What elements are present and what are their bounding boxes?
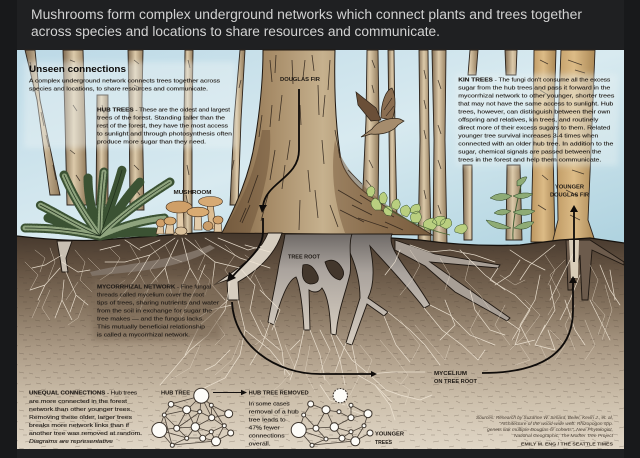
pale taproot of young tree bbox=[569, 240, 579, 278]
far right side root bbox=[395, 240, 510, 321]
text block: hub trees: trees of the forest. Standing taller than the bbox=[97, 116, 225, 122]
sources credit: Sources: Research by Suzanne W. Simard, Beiler, Kevin J., et. al, bbox=[476, 415, 613, 420]
small plant root bbox=[57, 241, 72, 272]
text block: kin trees: mycorrhizal network to other younger, shorter trees bbox=[458, 94, 615, 100]
fine mycelium threads bbox=[25, 240, 612, 405]
sources credit: genets link multiple Douglas-fir cohorts", New Phytologist, bbox=[487, 427, 613, 432]
text block: unequal connections bbox=[29, 391, 143, 445]
text block: kin trees: trees in the forest and help them communicate. bbox=[458, 158, 602, 164]
text box: mycorrhizal backing bbox=[93, 280, 221, 340]
intro text: species and locations, to share resources and communicate. bbox=[29, 86, 209, 92]
label: mycelium on tree root bbox=[434, 371, 478, 385]
label: hub tree: HUB TREE bbox=[161, 391, 190, 397]
text block: kin trees: trees, however, can distinguish between their own bbox=[458, 110, 610, 116]
leafy plant: dark green bbox=[486, 177, 535, 240]
text block: hub trees bbox=[97, 108, 232, 146]
label: Douglas fir: DOUGLAS FIR bbox=[280, 77, 320, 83]
text block: mycorrhizal network: tips of trees, sharing nutrients and water bbox=[97, 301, 219, 307]
label: hub tree removed: HUB TREE REMOVED bbox=[249, 391, 309, 397]
tree roots bbox=[57, 233, 624, 345]
text block: hub tree removed bbox=[249, 401, 299, 447]
text block: hub tree removed: tree leads to bbox=[249, 417, 286, 423]
sources credit: EMILY M. ENG / THE SEATTLE TIMES bbox=[521, 442, 613, 446]
text block: hub tree removed: connections bbox=[249, 433, 285, 439]
text block: kin trees: direct more of their excess sugars to them. Related bbox=[458, 126, 610, 132]
title bbox=[31, 7, 583, 39]
label: younger trees: YOUNGER bbox=[375, 432, 404, 438]
big right root bbox=[340, 234, 430, 345]
icon: bird bbox=[356, 88, 404, 137]
text block: unequal connections: Diagrams are representative bbox=[29, 439, 113, 445]
text block: kin trees: offspring and relatives, kin trees, and routinely bbox=[458, 118, 599, 124]
text block: kin trees: sugar, chemical signals are passed between the bbox=[458, 150, 601, 156]
pale left root bbox=[214, 233, 282, 300]
text block: mycorrhizal network: This mutually beneficial relationship bbox=[97, 325, 205, 331]
label: younger trees bbox=[375, 432, 404, 446]
label: mycelium on tree root: ON TREE ROOT bbox=[434, 379, 478, 385]
text block: hub trees: produce more sugar than they need. bbox=[97, 140, 207, 146]
intro text: A complex underground network connects trees together across bbox=[29, 78, 220, 84]
bark streaks on trees bbox=[30, 60, 585, 220]
text block: mycorrhizal network bbox=[97, 285, 219, 339]
text block: unequal connections: network than other younger trees. bbox=[29, 407, 133, 413]
label: younger Douglas fir: YOUNGER bbox=[555, 184, 584, 190]
illustration: soil bbox=[17, 232, 624, 449]
leafy plant: light green bbox=[367, 186, 467, 235]
fern bbox=[25, 170, 170, 236]
left lateral root bbox=[90, 245, 215, 276]
text block: mycorrhizal network: MYCORRHIZAL NETWORK - Fine fungal bbox=[97, 285, 211, 291]
text block: mycorrhizal network: from the soil in exchange for sugar the bbox=[97, 309, 212, 315]
text block: unequal connections: breaks more network links than if bbox=[29, 423, 130, 429]
dark topsoil line bbox=[17, 232, 624, 245]
central root bbox=[268, 234, 352, 335]
Douglas fir trunk bbox=[222, 50, 432, 235]
label: younger Douglas fir bbox=[550, 184, 589, 198]
mushrooms bbox=[156, 196, 223, 235]
title: across species and locations to share resources and communicate. bbox=[31, 24, 440, 39]
text block: hub tree removed: 47% fewer bbox=[249, 425, 280, 431]
text block: unequal connections: Removing these older, larger trees bbox=[29, 415, 132, 421]
heading: unseen connections: Unseen connections bbox=[29, 64, 126, 75]
arrow: trunk to root bbox=[227, 89, 578, 377]
network diagram: with hub tree bbox=[152, 388, 234, 447]
sources credit bbox=[476, 415, 614, 446]
text block: kin trees: KIN TREES - The fungi don't consume all the excess bbox=[458, 78, 611, 84]
text block: hub trees: rest of the forest, they have the most access bbox=[97, 124, 228, 130]
arrow: hub tree to removed bbox=[213, 390, 247, 395]
text block: kin trees: younger tree survival increases 3-4 times when bbox=[458, 134, 598, 140]
label backing: hub trees bbox=[24, 62, 236, 148]
text block: kin trees: sugar from the hub trees and pass it forward in the bbox=[458, 86, 610, 92]
label: younger Douglas fir: DOUGLAS FIR bbox=[550, 192, 589, 198]
text block: kin trees bbox=[458, 78, 615, 164]
label backing: kin trees bbox=[456, 74, 618, 166]
illustration: sky bbox=[17, 50, 624, 245]
title: Mushrooms form complex underground networks which connect plants and trees together bbox=[31, 7, 583, 22]
label: tree root: TREE ROOT bbox=[288, 255, 321, 261]
dark roots and root holes bbox=[302, 260, 344, 284]
young tree root bbox=[566, 240, 624, 300]
label: mycelium on tree root: MYCELIUM bbox=[434, 371, 467, 377]
mycelium threads bbox=[30, 238, 620, 420]
text block: unequal connections: another tree was removed at random. bbox=[29, 431, 143, 437]
sources credit: National Geographic, The Mother Tree Project bbox=[514, 433, 614, 438]
text block: hub trees: to sunlight and through photosynthesis often bbox=[97, 132, 232, 138]
text block: mycorrhizal network: threads called mycelium cover the root bbox=[97, 293, 204, 299]
text block: unequal connections: UNEQUAL CONNECTIONS - Hub trees bbox=[29, 391, 137, 397]
text block: mycorrhizal network: tree makes — and the fungus lacks. bbox=[97, 317, 205, 323]
text block: mycorrhizal network: is called a mycorrhizal network. bbox=[97, 333, 191, 339]
text block: hub tree removed: overall. bbox=[249, 441, 271, 447]
text block: kin trees: connected with an older hub tree. In addition to the bbox=[458, 142, 613, 148]
label: mushroom: MUSHROOM bbox=[174, 190, 212, 196]
text block: hub tree removed: removal of a hub bbox=[249, 409, 299, 415]
intro text bbox=[29, 78, 220, 92]
text block: unequal connections: are more connected in the forest bbox=[29, 399, 128, 405]
background trees bbox=[25, 50, 596, 245]
network diagram: hub tree removed bbox=[291, 388, 373, 447]
label: younger trees: TREES bbox=[375, 440, 392, 446]
text block: kin trees: that may not have the same access to sunlight. Hub bbox=[458, 102, 613, 108]
text block: hub trees: HUB TREES - These are the oldest and largest bbox=[97, 108, 230, 114]
sources credit: "Architecture of the wood-wide web: Rhizopogon spp. bbox=[499, 421, 613, 426]
text block: hub tree removed: In some cases bbox=[249, 401, 290, 407]
